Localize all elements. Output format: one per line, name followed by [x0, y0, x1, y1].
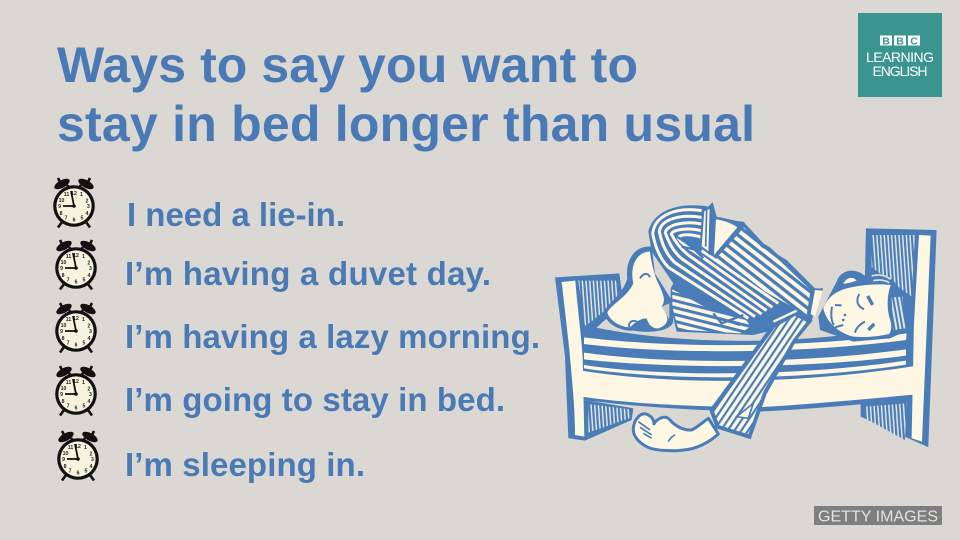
phrase 4: I’m going to stay in bed. — [125, 381, 505, 418]
title: you want to — [358, 37, 638, 93]
hanging arm — [709, 309, 813, 439]
logo: BBC Learning English — [858, 13, 942, 97]
illustration: man curled up in bed — [555, 202, 937, 451]
trouser cuff — [701, 207, 711, 253]
pyjama body — [648, 202, 823, 335]
collar — [811, 290, 823, 317]
logo: BBC Learning English: B — [896, 35, 904, 47]
phrase 5 — [57, 430, 365, 483]
logo: BBC Learning English: B — [882, 35, 890, 47]
phrase 4 — [55, 365, 505, 418]
face — [823, 284, 891, 337]
phrase 5: I’m sleeping in. — [125, 446, 365, 483]
logo: BBC Learning English: LEARNING — [866, 49, 934, 65]
logo: BBC Learning English: C — [910, 35, 918, 47]
title: Ways to say — [57, 37, 345, 93]
shorts stripes — [672, 289, 751, 333]
facial features — [855, 294, 865, 333]
title — [57, 37, 755, 152]
ankle detail — [677, 237, 743, 325]
phrase 1: I need a lie-in. — [127, 196, 345, 233]
curved leg stripes — [653, 210, 778, 318]
phrase 2 — [55, 239, 491, 292]
title: stay in bed longer than usual — [57, 96, 755, 152]
bare back triangle — [714, 219, 737, 255]
hair — [818, 271, 906, 342]
foot — [603, 247, 673, 332]
phrase 2: I’m having a duvet day. — [125, 255, 491, 292]
hair highlights — [892, 297, 905, 330]
phrase 3 — [55, 302, 540, 355]
credit: Getty Images: GETTY IMAGES — [818, 508, 938, 526]
list of phrases — [53, 177, 540, 483]
head — [818, 271, 906, 342]
logo: BBC Learning English: ENGLISH — [872, 63, 928, 79]
phrase 3: I’m having a lazy morning. — [125, 318, 540, 355]
hand — [633, 414, 718, 451]
phrase 1 — [53, 177, 345, 233]
shirt stripes — [715, 227, 811, 315]
ear — [843, 278, 857, 284]
bed — [555, 228, 937, 447]
